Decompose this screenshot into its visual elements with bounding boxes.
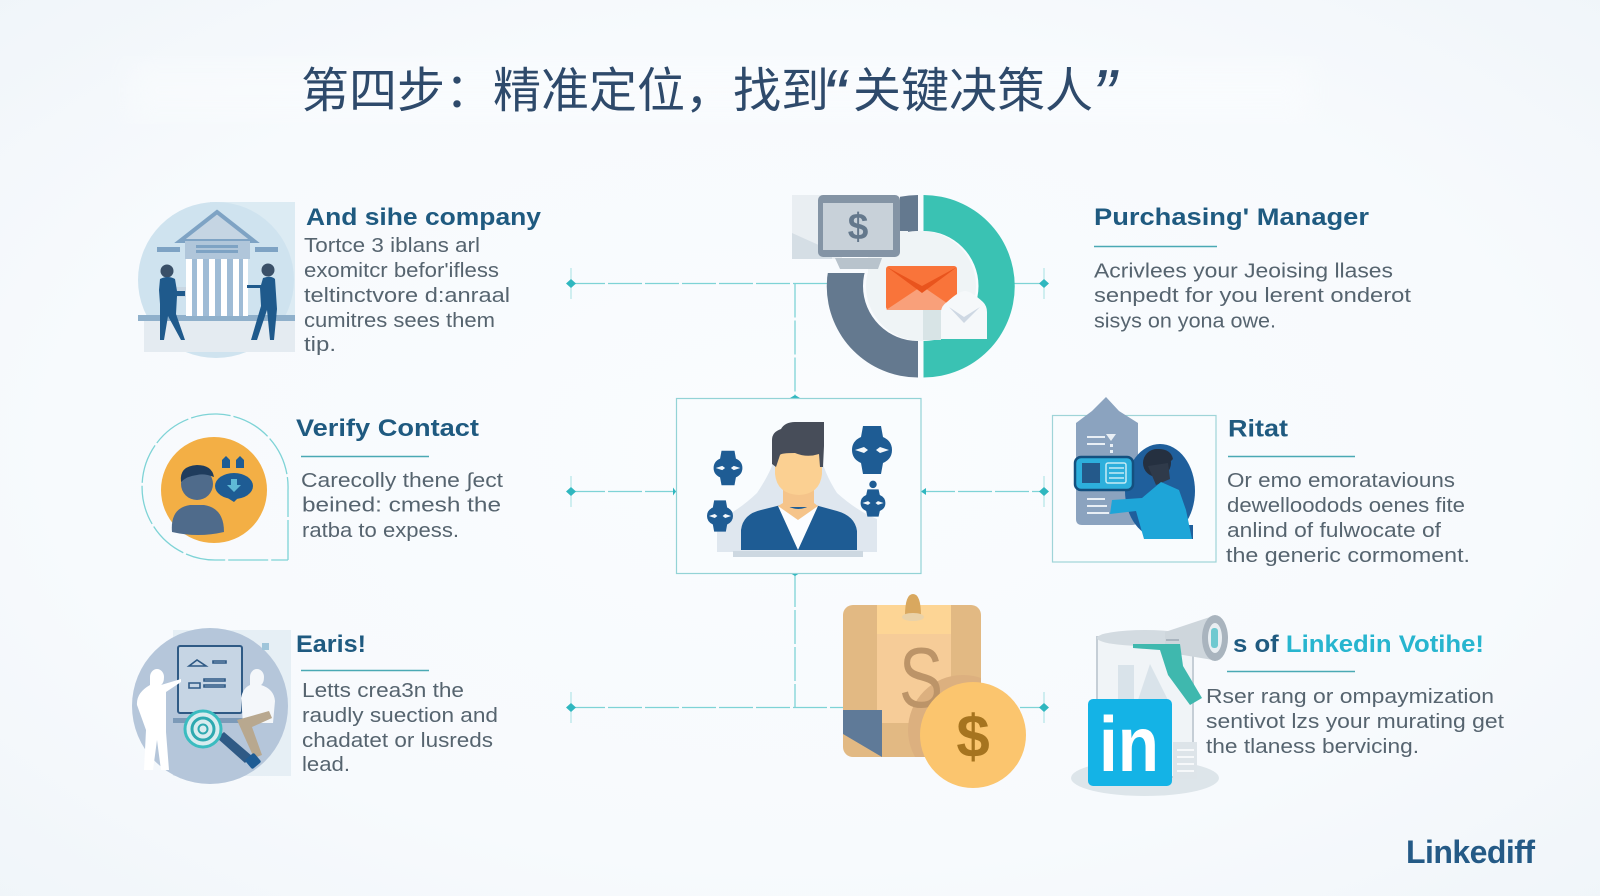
icon: linkedin tile with cylinder: in [1099, 700, 1159, 788]
panel: purchasing manager [1094, 204, 1412, 332]
connector lines [566, 268, 1049, 723]
body text [1226, 470, 1470, 567]
body text: anlind of fulwocate of [1227, 520, 1441, 542]
heading: Ritat [1228, 416, 1288, 442]
icon: person [717, 422, 877, 557]
brand logo text: Linkediff [1406, 834, 1535, 870]
icon: person with clipboard [1052, 397, 1216, 562]
icon: notepad and coin [843, 594, 1026, 788]
icon: orange envelope [886, 266, 957, 310]
title: “ [822, 56, 850, 136]
body text [301, 470, 503, 542]
icon: monitor with dollar [792, 195, 900, 269]
body text: exomitcr befor'ifless [304, 260, 499, 282]
body text: teltinctvore d:anraal [304, 285, 510, 307]
heading: Verify Contact [296, 415, 479, 442]
body text: dewelloodods oenes fite [1227, 495, 1465, 517]
icon: notepad and coin: S [899, 631, 943, 726]
body text [302, 680, 498, 776]
icon: contact badge [142, 414, 288, 560]
title: ” [1092, 56, 1119, 136]
icon: linkedin tile with cylinder [1071, 615, 1228, 796]
icon: puzzle pieces [707, 426, 892, 532]
body text: the tlaness bervicing. [1206, 736, 1419, 758]
body text: sentivot lzs your murating get [1206, 711, 1504, 733]
body text: Letts crea3n the [302, 680, 464, 702]
panel: linkedin [1071, 615, 1504, 796]
icon: monitor with dollar: $ [848, 206, 869, 247]
heading: Earis! [296, 631, 366, 658]
heading: Purchasing' Manager [1094, 204, 1369, 231]
body text: tip. [304, 334, 336, 356]
heading: And sihe company [306, 204, 542, 231]
panel: ritat [1052, 397, 1470, 567]
body text: the generic cormoment. [1226, 545, 1470, 567]
donut chart with monitor and envelopes [792, 190, 1015, 378]
body text: senpedt for you lerent onderot [1094, 285, 1412, 307]
panel: earis [132, 628, 498, 784]
title: 第四步：精准定位，找到 [301, 65, 829, 118]
title [301, 56, 1119, 136]
body text: Tortce 3 iblans arl [304, 235, 480, 257]
icon: bank with two people [138, 202, 295, 358]
body text: Carecolly thene ∫ect [301, 470, 503, 492]
heading: s of Linkedin Votihe! [1233, 631, 1484, 658]
body text [304, 235, 510, 356]
body text: Acrivlees your Jeoising llases [1094, 260, 1393, 282]
body text: sisys on yona owe. [1094, 310, 1276, 332]
panel: decision maker [676, 398, 921, 574]
body text [1094, 260, 1412, 332]
body text [1206, 686, 1504, 758]
body text: lead. [302, 754, 350, 776]
body text: chadatet or lusreds [302, 730, 493, 752]
icon: search team [132, 628, 291, 784]
icon: white envelope [941, 291, 987, 339]
body text: raudly suection and [302, 705, 498, 727]
panel: company [138, 202, 542, 358]
title: 关键决策人 [853, 65, 1093, 118]
body text: ratba to expess. [302, 520, 459, 542]
body text: Or emo emorataviouns [1227, 470, 1455, 492]
icon: notepad and coin: $ [956, 703, 990, 770]
body text: beined: cmesh the [302, 494, 501, 516]
panel: verify contact [142, 414, 503, 560]
body text: cumitres sees them [304, 310, 495, 332]
body text: Rser rang or ompaymization [1206, 686, 1494, 708]
